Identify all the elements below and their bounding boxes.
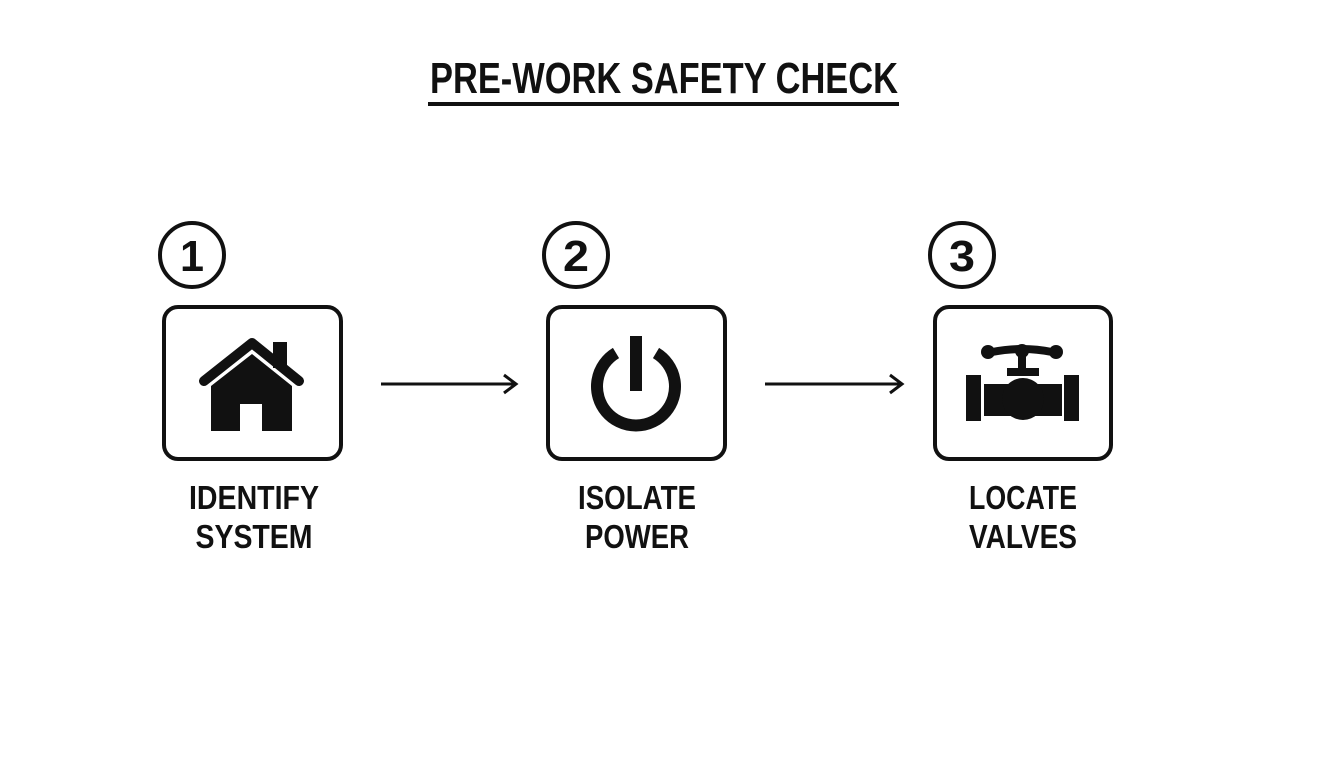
arrow 1 <box>381 375 516 393</box>
icon box: valve <box>935 307 1111 459</box>
step 3: locate valves: VALVES <box>969 518 1077 555</box>
label: locate valves: LOCATE <box>969 479 1077 516</box>
number badge 1 <box>160 223 224 287</box>
step 3: locate valves <box>930 223 1111 555</box>
icon box: power <box>548 307 725 459</box>
number badge 2: 2 <box>563 232 589 281</box>
step 2: isolate power <box>544 223 725 555</box>
icon box: house <box>164 307 341 459</box>
step 2: isolate power: POWER <box>585 518 689 555</box>
step 1: identify system <box>160 223 341 555</box>
number badge 2 <box>544 223 608 287</box>
arrow 2 <box>765 375 902 393</box>
label: identify system: IDENTIFY <box>189 479 319 516</box>
title: PRE-WORK SAFETY CHECK <box>430 54 898 103</box>
number badge 3 <box>930 223 994 287</box>
number badge 3: 3 <box>949 232 975 281</box>
label: isolate power: ISOLATE <box>578 479 696 516</box>
number badge 1: 1 <box>180 232 204 281</box>
step 1: identify system: SYSTEM <box>196 518 312 555</box>
